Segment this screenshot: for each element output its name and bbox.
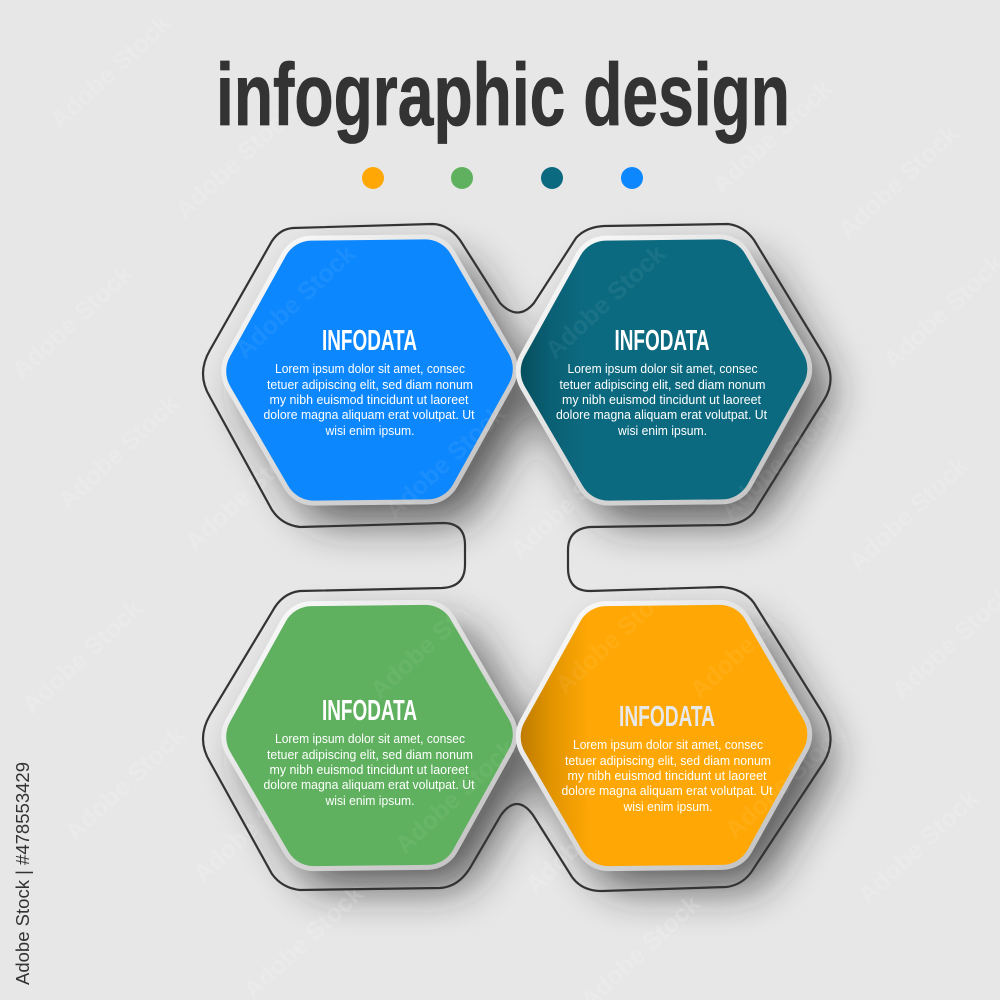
panel: orange hexagon: wisi enim ipsum. bbox=[623, 800, 712, 814]
watermarks: Adobe Stock bbox=[60, 722, 191, 846]
panel: green hexagon: dolore magna aliquam erat volutpat. Ut bbox=[264, 778, 475, 792]
watermarks over panels: Adobe Stock bbox=[715, 400, 846, 524]
panel: orange hexagon: INFODATA bbox=[619, 701, 715, 733]
watermarks: Adobe Stock bbox=[843, 452, 974, 576]
panel: blue hexagon: Lorem ipsum dolor sit amet, consec bbox=[275, 362, 465, 376]
panel: orange hexagon: tetuer adipiscing elit, sed diam nonum bbox=[565, 754, 771, 768]
watermarks: Adobe Stock bbox=[53, 390, 184, 514]
watermarks over panels: Adobe Stock bbox=[540, 240, 671, 364]
panel: green hexagon bbox=[255, 634, 484, 837]
watermarks over panels bbox=[230, 240, 851, 859]
panel: green hexagon: INFODATA bbox=[322, 695, 417, 727]
title: infographic design bbox=[216, 45, 790, 144]
panel: green hexagon: my nibh euismod tincidunt ut laoreet bbox=[270, 763, 469, 777]
watermarks: Adobe Stock bbox=[180, 432, 311, 556]
panel: green hexagon: Lorem ipsum dolor sit amet, consec bbox=[275, 732, 465, 746]
panel: orange hexagon: my nibh euismod tincidunt ut laoreet bbox=[568, 769, 767, 783]
panel: teal hexagon: wisi enim ipsum. bbox=[617, 424, 707, 438]
panel: blue hexagon bbox=[255, 269, 484, 471]
panel: orange hexagon: Lorem ipsum dolor sit amet, consec bbox=[573, 738, 763, 752]
panel: orange hexagon bbox=[549, 634, 779, 837]
watermarks: Adobe Stock bbox=[853, 785, 984, 909]
panel: green hexagon: tetuer adipiscing elit, sed diam nonum bbox=[267, 748, 473, 762]
panel: blue hexagon: INFODATA bbox=[322, 325, 417, 357]
panel: teal hexagon bbox=[549, 269, 779, 471]
watermarks: Adobe Stock bbox=[7, 260, 138, 384]
watermarks: Adobe Stock bbox=[188, 764, 319, 888]
connector outline bbox=[203, 224, 831, 891]
panel: teal hexagon: INFODATA bbox=[614, 325, 710, 357]
panel: blue hexagon: tetuer adipiscing elit, sed diam nonum bbox=[267, 378, 473, 392]
panel: green hexagon: wisi enim ipsum. bbox=[325, 794, 414, 808]
panel: teal hexagon: tetuer adipiscing elit, sed diam nonum bbox=[560, 378, 766, 392]
watermarks over panels: Adobe Stock bbox=[230, 240, 361, 364]
watermarks over panels: Adobe Stock bbox=[685, 580, 816, 704]
watermarks: Adobe Stock bbox=[707, 75, 838, 199]
color dots bbox=[362, 167, 643, 189]
panel: orange hexagon: dolore magna aliquam erat volutpat. Ut bbox=[562, 784, 773, 798]
watermarks: Adobe Stock bbox=[520, 775, 651, 899]
watermarks over panels: Adobe Stock bbox=[550, 575, 681, 699]
watermarks: Adobe Stock bbox=[170, 100, 301, 224]
watermarks over panels: Adobe Stock bbox=[380, 400, 511, 524]
panel: teal hexagon: Lorem ipsum dolor sit amet, consec bbox=[568, 362, 758, 376]
panel: teal hexagon: my nibh euismod tincidunt ut laoreet bbox=[562, 393, 762, 407]
stock credit: Adobe Stock | #478553429 bbox=[13, 762, 33, 985]
panel: teal hexagon: dolore magna aliquam erat volutpat. Ut bbox=[556, 408, 768, 422]
watermarks over panels: Adobe Stock bbox=[720, 720, 851, 844]
watermarks over panels: Adobe Stock bbox=[390, 735, 521, 859]
watermarks: Adobe Stock bbox=[833, 120, 964, 244]
watermarks: Adobe Stock bbox=[17, 595, 148, 719]
watermarks: Adobe Stock bbox=[505, 440, 636, 564]
panel: blue hexagon: wisi enim ipsum. bbox=[325, 424, 414, 438]
hexagon drop shadows bbox=[274, 292, 800, 858]
watermarks: Adobe Stock bbox=[45, 10, 176, 134]
watermarks over panels: Adobe Stock bbox=[365, 580, 496, 704]
panel: blue hexagon: my nibh euismod tincidunt ut laoreet bbox=[270, 393, 469, 407]
panel: blue hexagon: dolore magna aliquam erat volutpat. Ut bbox=[264, 408, 475, 422]
